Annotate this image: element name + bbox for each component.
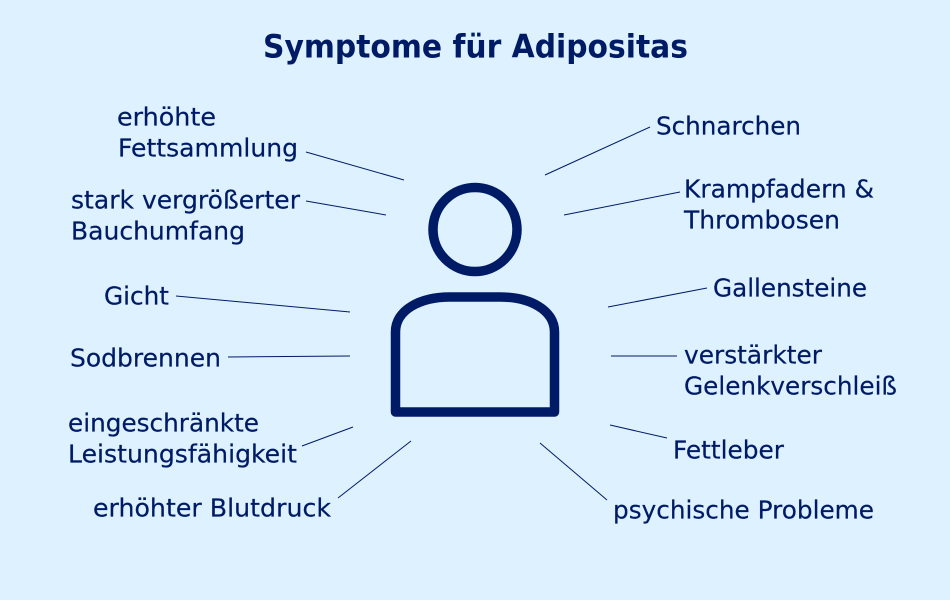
icon: person xyxy=(396,188,554,412)
label: Gallensteine xyxy=(608,274,867,307)
label: verstärkter Gelenkverschleiß: Gelenkverschleiß xyxy=(684,372,897,400)
label: Schnarchen xyxy=(545,112,801,175)
label: Krampfadern & Thrombosen xyxy=(564,174,874,234)
label: Sodbrennen: Sodbrennen xyxy=(70,344,221,372)
label: eingeschränkte Leistungsfähigkeit: eingeschränkte xyxy=(68,408,259,438)
label: Gicht xyxy=(104,282,350,312)
label: erhöhte Fettsammlung: erhöhte xyxy=(117,102,216,132)
label: psychische Probleme: psychische Probleme xyxy=(613,496,874,524)
label: stark vergrößerter Bauchumfang: Bauchumfang xyxy=(71,216,245,246)
label: Gallensteine: Gallensteine xyxy=(713,274,867,302)
label: psychische Probleme xyxy=(540,443,874,524)
label: erhöhter Blutdruck xyxy=(93,441,411,522)
label: Gicht: Gicht xyxy=(104,282,169,310)
label: verstärkter Gelenkverschleiß: verstärkter xyxy=(684,340,823,370)
label: Krampfadern & Thrombosen: Thrombosen xyxy=(683,206,840,234)
label: verstärkter Gelenkverschleiß xyxy=(611,340,897,400)
label: erhöhte Fettsammlung xyxy=(117,102,404,180)
label: eingeschränkte Leistungsfähigkeit: Leistungsfähigkeit xyxy=(68,440,297,468)
label: erhöhte Fettsammlung: Fettsammlung xyxy=(118,134,298,162)
label: eingeschränkte Leistungsfähigkeit xyxy=(68,408,353,468)
label: stark vergrößerter Bauchumfang: stark vergrößerter xyxy=(71,186,301,214)
label: erhöhter Blutdruck: erhöhter Blutdruck xyxy=(93,494,332,522)
title: Symptome für Adipositas xyxy=(263,28,688,66)
label: Fettleber: Fettleber xyxy=(673,436,785,464)
label: Schnarchen: Schnarchen xyxy=(656,112,801,140)
label: Fettleber xyxy=(610,425,785,464)
label: stark vergrößerter Bauchumfang xyxy=(71,186,386,246)
label: Krampfadern & Thrombosen: Krampfadern & xyxy=(684,174,874,204)
